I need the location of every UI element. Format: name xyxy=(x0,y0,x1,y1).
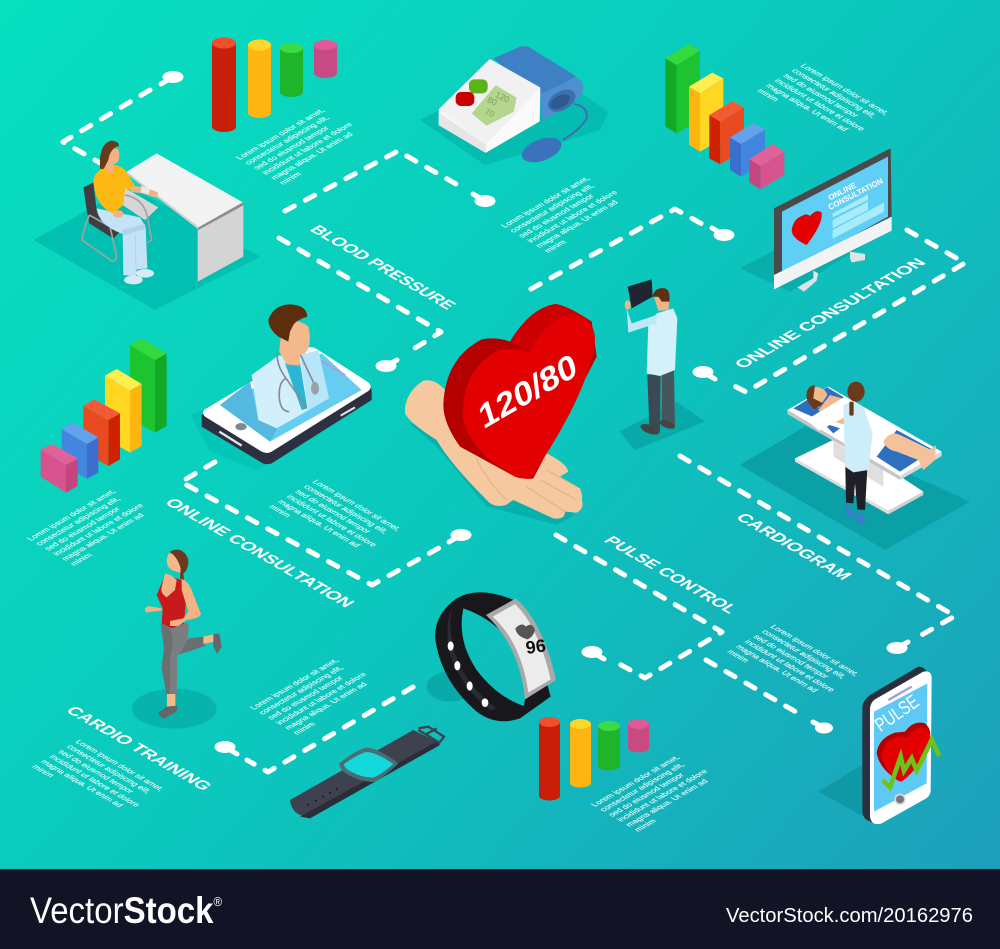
text block: pulse phone: incididunt ut labore et dolore xyxy=(742,638,837,693)
text block: top left: magna aliqua. Ut enim ad xyxy=(269,131,355,181)
text block: top left: incididunt ut labore et dolore xyxy=(260,121,355,176)
text block: center left: magna aliqua. Ut enim ad xyxy=(276,498,362,549)
text block: left: minim xyxy=(68,552,95,567)
text block: center left: Lorem ipsum dolor sit amet, xyxy=(310,478,403,532)
illustration: blood pressure monitor xyxy=(420,46,608,167)
text block: cardio training: Lorem ipsum dolor sit amet, xyxy=(73,738,166,792)
connector: pulse control xyxy=(556,535,722,678)
illustration: desktop monitor xyxy=(740,148,892,292)
text block: bottom cylinders: Lorem ipsum dolor sit amet, xyxy=(589,754,682,808)
text block: blood pressure: magna aliqua. Ut enim ad xyxy=(534,199,620,249)
text block: pulse phone: magna aliqua. Ut enim ad xyxy=(734,643,820,694)
text block: blood pressure: minim xyxy=(542,239,569,254)
text block: bottom cylinders: minim xyxy=(632,818,659,833)
text block: center left: consectetur adipiscing elit, xyxy=(302,483,391,535)
text block: watch: incididunt ut labore et dolore xyxy=(274,671,369,726)
illustration: pulse phone xyxy=(818,667,939,824)
text block: bottom cylinders: consectetur adipiscing elit, xyxy=(598,762,687,813)
connector: top left xyxy=(63,71,184,164)
text block: cardio training: magna aliqua. Ut enim ad xyxy=(39,758,125,809)
text block: top right: incididunt ut labore et dolore xyxy=(772,77,867,132)
text block: blood pressure: Lorem ipsum dolor sit amet, xyxy=(499,175,592,229)
text block: bottom cylinders: incididunt ut labore et dolore xyxy=(615,768,710,823)
illustration: mobile doctor xyxy=(190,304,372,470)
text block: cardio training: consectetur adipiscing elit, xyxy=(65,743,154,795)
illustration: pulse phone: PULSE xyxy=(871,691,923,736)
text block: watch: Lorem ipsum dolor sit amet, xyxy=(248,657,341,711)
connector: online consultation left xyxy=(181,462,472,585)
connector: blood pressure upper xyxy=(285,151,496,211)
text block: left: magna aliqua. Ut enim ad xyxy=(60,512,146,562)
text block: cardio training: incididunt ut labore et dolore xyxy=(47,753,142,808)
illustration: patient at desk xyxy=(33,141,260,310)
illustration: blood pressure monitor: 70 xyxy=(483,106,496,119)
label: online consultation right: ONLINE CONSULTATION xyxy=(731,256,930,371)
label: cardiogram: CARDIOGRAM xyxy=(732,511,855,583)
text block: pulse phone: minim xyxy=(725,648,752,664)
text block: center left: sed do eiusmod tempor xyxy=(293,488,373,535)
connector: blood pressure lower xyxy=(279,238,441,372)
text block: blood pressure: sed do eiusmod tempor xyxy=(516,193,597,239)
text block: top right: consectetur adipiscing elit, xyxy=(790,67,879,119)
text block: top right: sed do eiusmod tempor xyxy=(781,72,861,119)
illustration: doctor reading x-ray xyxy=(619,279,705,450)
text block: pulse phone: Lorem ipsum dolor sit amet, xyxy=(768,623,861,677)
connector: online consultation upper xyxy=(531,209,734,289)
text block: left: incididunt ut labore et dolore xyxy=(51,502,146,557)
text block: top left: Lorem ipsum dolor sit amet, xyxy=(234,107,327,161)
illustration: blood pressure monitor: 120 xyxy=(494,89,511,105)
label: blood pressure: BLOOD PRESSURE xyxy=(306,223,460,312)
bar chart: left blocks xyxy=(41,338,167,493)
connector: online consultation right xyxy=(692,230,965,392)
connector: pulse phone xyxy=(706,660,833,734)
text block: top left: minim xyxy=(277,171,304,186)
text block: left: consectetur adipiscing elit, xyxy=(34,496,123,547)
footer bar: VectorStock xyxy=(30,890,224,931)
illustration: smart wristband xyxy=(427,592,556,721)
text block: left: sed do eiusmod tempor xyxy=(42,506,123,552)
text block: center left: incididunt ut labore et dolore xyxy=(284,493,379,548)
bar chart: top right blocks xyxy=(665,44,784,189)
text block: watch: minim xyxy=(291,721,318,736)
text block: blood pressure: consectetur adipiscing elit, xyxy=(508,183,597,234)
text block: center left: minim xyxy=(267,503,294,519)
illustration: hand holding heart: 120/80 xyxy=(475,347,581,437)
text block: pulse phone: sed do eiusmod tempor xyxy=(751,633,831,680)
illustration: desktop monitor: ONLINE xyxy=(827,180,858,202)
text block: top left: consectetur adipiscing elit, xyxy=(243,115,332,166)
text block: top right: minim xyxy=(755,87,782,103)
text block: watch: magna aliqua. Ut enim ad xyxy=(283,681,369,731)
bar chart: top cylinders xyxy=(212,38,337,132)
text block: top right: Lorem ipsum dolor sit amet, xyxy=(798,62,891,116)
illustration: runner xyxy=(132,550,222,729)
footer bar: VectorStock.com/20162976 xyxy=(726,905,973,927)
illustration: smart wristband: 96 xyxy=(524,635,547,658)
illustration: smartwatch xyxy=(290,727,444,818)
bar chart: bottom cylinders xyxy=(539,717,649,800)
text block: watch: sed do eiusmod tempor xyxy=(265,675,346,721)
text block: blood pressure: incididunt ut labore et dolore xyxy=(525,189,620,244)
label: cardio training: CARDIO TRAINING xyxy=(62,704,216,793)
text block: top right: magna aliqua. Ut enim ad xyxy=(764,82,850,133)
text block: left: Lorem ipsum dolor sit amet, xyxy=(25,488,118,542)
illustration: desktop monitor: CONSULTATION xyxy=(827,176,885,212)
connector: cardio training xyxy=(214,687,413,772)
text block: cardio training: minim xyxy=(30,763,57,779)
footer bar xyxy=(0,869,1000,949)
label: online consultation left: ONLINE CONSULTATION xyxy=(161,496,358,610)
illustration: hand holding heart xyxy=(405,304,597,525)
connector: cardiogram xyxy=(680,456,955,654)
text block: top left: sed do eiusmod tempor xyxy=(251,125,332,171)
label: pulse control: PULSE CONTROL xyxy=(600,534,742,616)
text block: bottom cylinders: magna aliqua. Ut enim ad xyxy=(624,778,710,828)
footer bar: ® xyxy=(213,894,222,909)
illustration: cardiogram exam table xyxy=(740,382,970,550)
illustration: blood pressure monitor: 80 xyxy=(486,94,499,108)
text block: watch: consectetur adipiscing elit, xyxy=(257,665,346,716)
text block: bottom cylinders: sed do eiusmod tempor xyxy=(606,772,687,818)
text block: pulse phone: consectetur adipiscing elit, xyxy=(760,628,849,680)
text block: cardio training: sed do eiusmod tempor xyxy=(56,748,136,795)
